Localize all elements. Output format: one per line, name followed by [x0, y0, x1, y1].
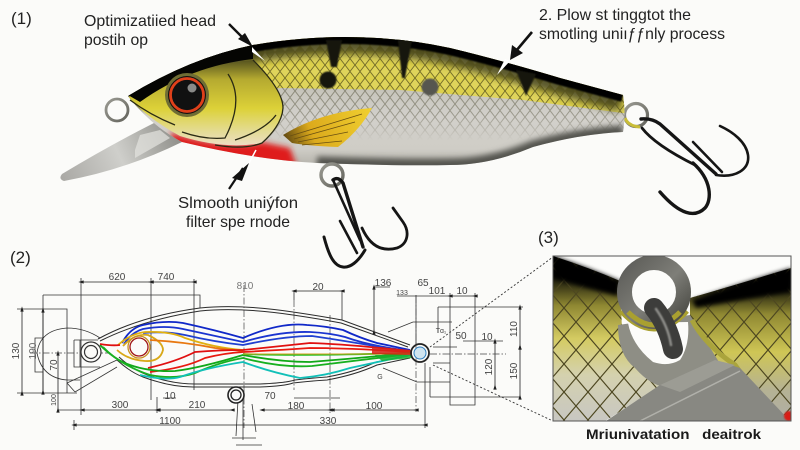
dark bars and spots	[320, 40, 536, 96]
label: (2): (2)	[10, 248, 31, 267]
lure body	[128, 37, 624, 166]
red tip	[783, 410, 790, 420]
left scaled skin	[553, 256, 662, 421]
grey diving lip	[606, 366, 789, 420]
yellow neck edge	[690, 319, 742, 370]
callout: optimized head: postih op	[84, 32, 148, 49]
dimension labels: 620	[109, 272, 126, 283]
dimension labels: 65	[417, 278, 429, 289]
eye	[165, 73, 209, 117]
dimension labels: 101	[429, 286, 446, 297]
black back wedges	[553, 256, 791, 308]
gill lines	[130, 60, 283, 147]
dimension labels: 10	[456, 286, 468, 297]
callout: smooth uniform	[178, 195, 298, 231]
dimension labels: 740	[158, 272, 175, 283]
dimension labels: 190	[28, 342, 39, 359]
diving lip	[60, 121, 182, 181]
arrow: head	[229, 24, 265, 61]
extension lines	[17, 278, 523, 445]
tail ring	[624, 104, 648, 127]
dimension labels: 100	[51, 394, 58, 406]
dimension labels: 70	[49, 359, 60, 371]
rear ring	[411, 344, 429, 362]
tail treble hook	[641, 119, 748, 213]
callout: optimized head	[84, 13, 216, 49]
callout: flow smoothing: smotling uniıƒƒnly process	[539, 26, 725, 43]
dimension labels: 110	[509, 321, 520, 337]
flow streamlines	[100, 322, 412, 379]
dimension labels: 180	[288, 401, 305, 412]
dimension labels: 136	[375, 278, 392, 289]
callout: flow smoothing: 2. Plow st tinggtot the	[539, 7, 691, 24]
callout: smooth uniform: filter spe rnode	[186, 214, 290, 231]
dimension labels: 150	[509, 362, 520, 379]
dimension labels: 810	[237, 281, 254, 292]
belly treble hook	[324, 179, 407, 267]
dimension labels: 20	[312, 282, 324, 293]
inset frame	[553, 256, 791, 421]
dimension labels: Tɑ₁	[436, 328, 447, 335]
dimension labels: 50	[455, 331, 467, 342]
panel 3: magnified tow ring	[538, 228, 794, 442]
dimension labels: 100	[366, 401, 383, 412]
head eye circle	[128, 336, 150, 358]
dimension labels: 330	[320, 416, 337, 427]
label: (3): (3)	[538, 228, 559, 247]
belly ring	[228, 387, 244, 403]
callout: flow smoothing	[539, 7, 725, 43]
caption: Mriunivatation deaitrok	[586, 426, 761, 442]
dimension labels: 1100	[159, 416, 181, 427]
belly ring	[321, 164, 343, 186]
lure outline	[98, 307, 410, 387]
dimension labels: 120	[484, 358, 495, 375]
dotted zoom guide lines	[430, 257, 553, 421]
panel 1: lure illustration	[11, 7, 748, 267]
callout: smooth uniform: Slmooth uniýfon	[178, 195, 298, 212]
grey neck	[618, 315, 722, 387]
arrow: back	[497, 32, 532, 75]
dimension labels: 210	[189, 400, 206, 411]
dimension labels: G	[377, 374, 383, 381]
dimension labels	[11, 272, 520, 427]
panel 2: technical flow diagram	[10, 248, 523, 445]
ring	[622, 262, 686, 328]
callout: optimized head: Optimizatiied head	[84, 13, 216, 30]
dimension labels: 300	[112, 400, 129, 411]
dimension labels: 133	[396, 290, 408, 297]
red belly	[167, 130, 300, 162]
dimension arrows	[22, 282, 520, 425]
dimension labels: 70	[264, 391, 276, 402]
white hole behind ring	[628, 322, 688, 364]
right scaled skin	[690, 268, 791, 421]
dimension labels: 10	[481, 332, 493, 343]
dimension labels: 10	[164, 391, 176, 402]
arrow: belly	[229, 150, 256, 189]
nose ring	[106, 99, 128, 121]
dimension labels: 130	[11, 342, 22, 359]
link loop	[654, 308, 673, 349]
front ring	[81, 342, 101, 362]
pectoral fin	[283, 108, 372, 147]
center lines	[30, 285, 506, 428]
label: (1): (1)	[11, 9, 32, 28]
head plate	[128, 60, 283, 145]
inset picture	[553, 256, 794, 421]
